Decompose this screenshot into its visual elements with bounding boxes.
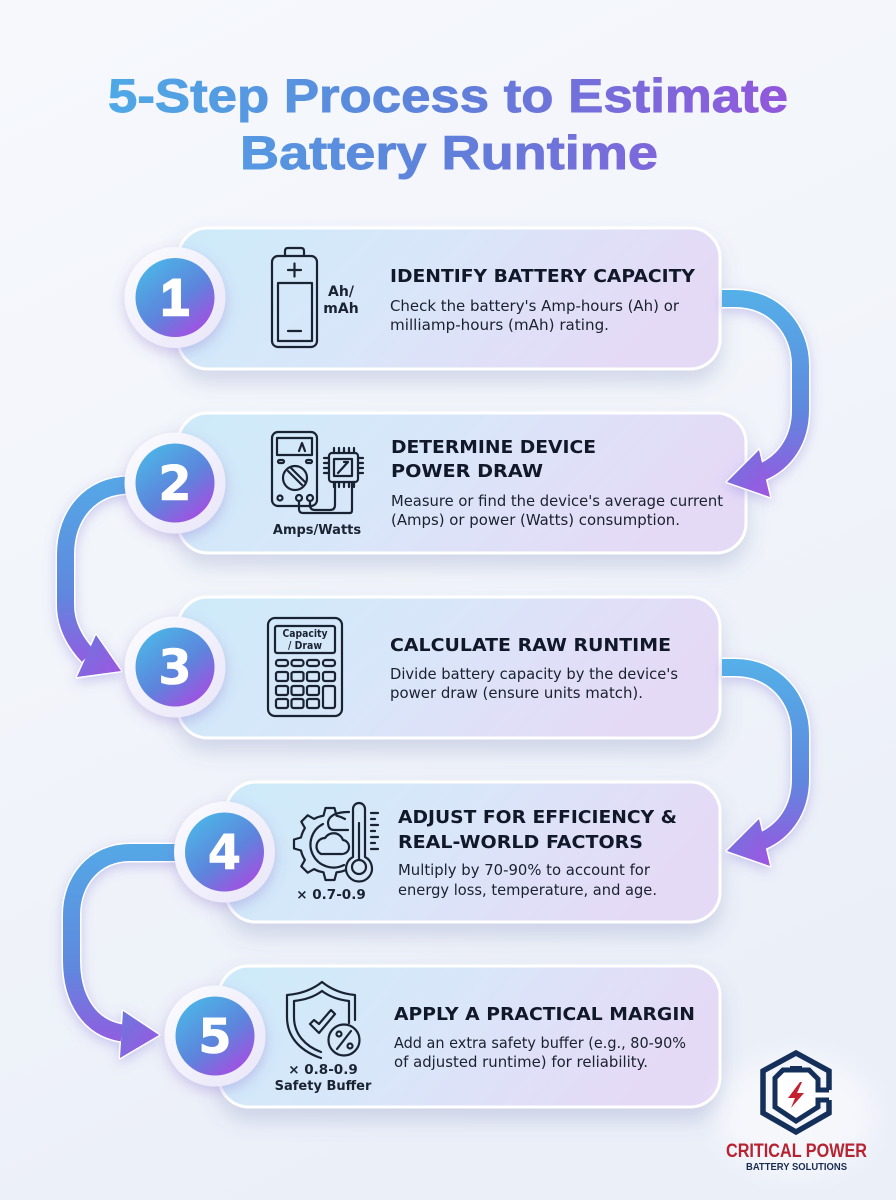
heading: determine device power draw xyxy=(391,437,596,482)
arrow: step 3 to step 4 xyxy=(722,668,800,866)
heading: adjust for efficiency and real-world factors: REAL-WORLD FACTORS xyxy=(398,832,643,853)
icon: calculator: / Draw xyxy=(288,640,322,652)
panel: step 3 calculate raw runtime xyxy=(178,597,720,738)
heading: adjust for efficiency and real-world factors xyxy=(398,807,677,853)
logo wordmark: CRITICAL POWER xyxy=(726,1141,867,1162)
title: 5-Step Process to Estimate xyxy=(108,69,788,122)
text: step 3 description xyxy=(390,665,678,702)
number badge 1 xyxy=(124,247,226,348)
number badge 5 xyxy=(164,986,266,1086)
heading: identify battery capacity: IDENTIFY BATTERY CAPACITY xyxy=(390,266,696,287)
text: step 5 description: Add an extra safety buffer (e.g., 80-90% xyxy=(394,1034,686,1052)
text: step 2 description: (Amps) or power (Watts) consumption. xyxy=(391,511,680,529)
number badge 4: 4 xyxy=(208,825,241,881)
number badge 1: 1 xyxy=(161,269,189,326)
number badge 2 xyxy=(124,432,226,534)
arrow: step 4 to step 5 xyxy=(72,852,180,1058)
arrow: step 1 to step 2 xyxy=(722,298,800,497)
icon: shield with check and percent: Safety Buffer xyxy=(275,1079,372,1094)
heading: calculate raw runtime: CALCULATE RAW RUNTIME xyxy=(390,635,671,656)
number badge 4 xyxy=(174,802,275,902)
text: step 1 description xyxy=(390,297,680,334)
title xyxy=(108,69,788,179)
icon: calculator xyxy=(268,618,342,716)
icon: calculator: Capacity xyxy=(282,628,328,640)
text: step 2 description xyxy=(391,492,723,529)
icon: shield with check and percent: × 0.8-0.9 xyxy=(288,1062,358,1078)
number badge 5: 5 xyxy=(198,1009,232,1065)
number badge 3: 3 xyxy=(158,640,192,696)
text: step 1 description: milliamp-hours (mAh) rating. xyxy=(390,316,609,334)
heading: apply a practical margin: APPLY A PRACTICAL MARGIN xyxy=(394,1004,695,1025)
icon: battery with Ah/mAh label: Ah/ xyxy=(328,284,355,300)
logo wordmark: BATTERY SOLUTIONS xyxy=(746,1161,847,1173)
panel: step 1 identify battery capacity xyxy=(178,228,720,369)
heading: determine device power draw: DETERMINE DEVICE xyxy=(391,437,596,458)
icon: multimeter and chip: Amps/Watts xyxy=(273,523,361,538)
icon: battery with Ah/mAh label: mAh xyxy=(323,301,359,317)
icon: gear, cloud and thermometer xyxy=(294,803,378,903)
number badge 2: 2 xyxy=(158,456,192,512)
text: step 4 description: Multiply by 70-90% to account for xyxy=(398,861,651,879)
text: step 4 description xyxy=(398,861,657,899)
icon: multimeter and chip xyxy=(272,432,363,538)
text: step 5 description xyxy=(394,1034,686,1071)
panel: step 2 determine device power draw xyxy=(178,413,746,553)
logo: critical power battery solutions xyxy=(718,1053,874,1175)
panel: step 4 adjust for efficiency xyxy=(226,782,720,922)
text: step 4 description: energy loss, temperature, and age. xyxy=(398,881,657,899)
text: step 3 description: power draw (ensure units match). xyxy=(390,684,643,702)
icon: hexagon battery mark xyxy=(763,1053,829,1132)
title: Battery Runtime xyxy=(240,126,658,179)
panel: step 5 apply a practical margin xyxy=(219,966,720,1107)
icon: battery with Ah/mAh label xyxy=(272,248,359,347)
text: step 1 description: Check the battery's Amp-hours (Ah) or xyxy=(390,297,680,315)
number badge 3 xyxy=(124,616,226,718)
text: step 5 description: of adjusted runtime) for reliability. xyxy=(394,1053,648,1071)
icon: gear, cloud and thermometer: × 0.7-0.9 xyxy=(296,887,366,903)
text: step 3 description: Divide battery capacity by the device's xyxy=(390,665,678,683)
icon: shield with check and percent xyxy=(275,982,372,1094)
logo wordmark xyxy=(726,1141,867,1173)
arrow: step 2 to step 3 xyxy=(66,485,130,677)
text: step 2 description: Measure or find the device's average current xyxy=(391,492,723,510)
heading: adjust for efficiency and real-world factors: ADJUST FOR EFFICIENCY & xyxy=(398,807,677,828)
heading: determine device power draw: POWER DRAW xyxy=(391,461,543,482)
